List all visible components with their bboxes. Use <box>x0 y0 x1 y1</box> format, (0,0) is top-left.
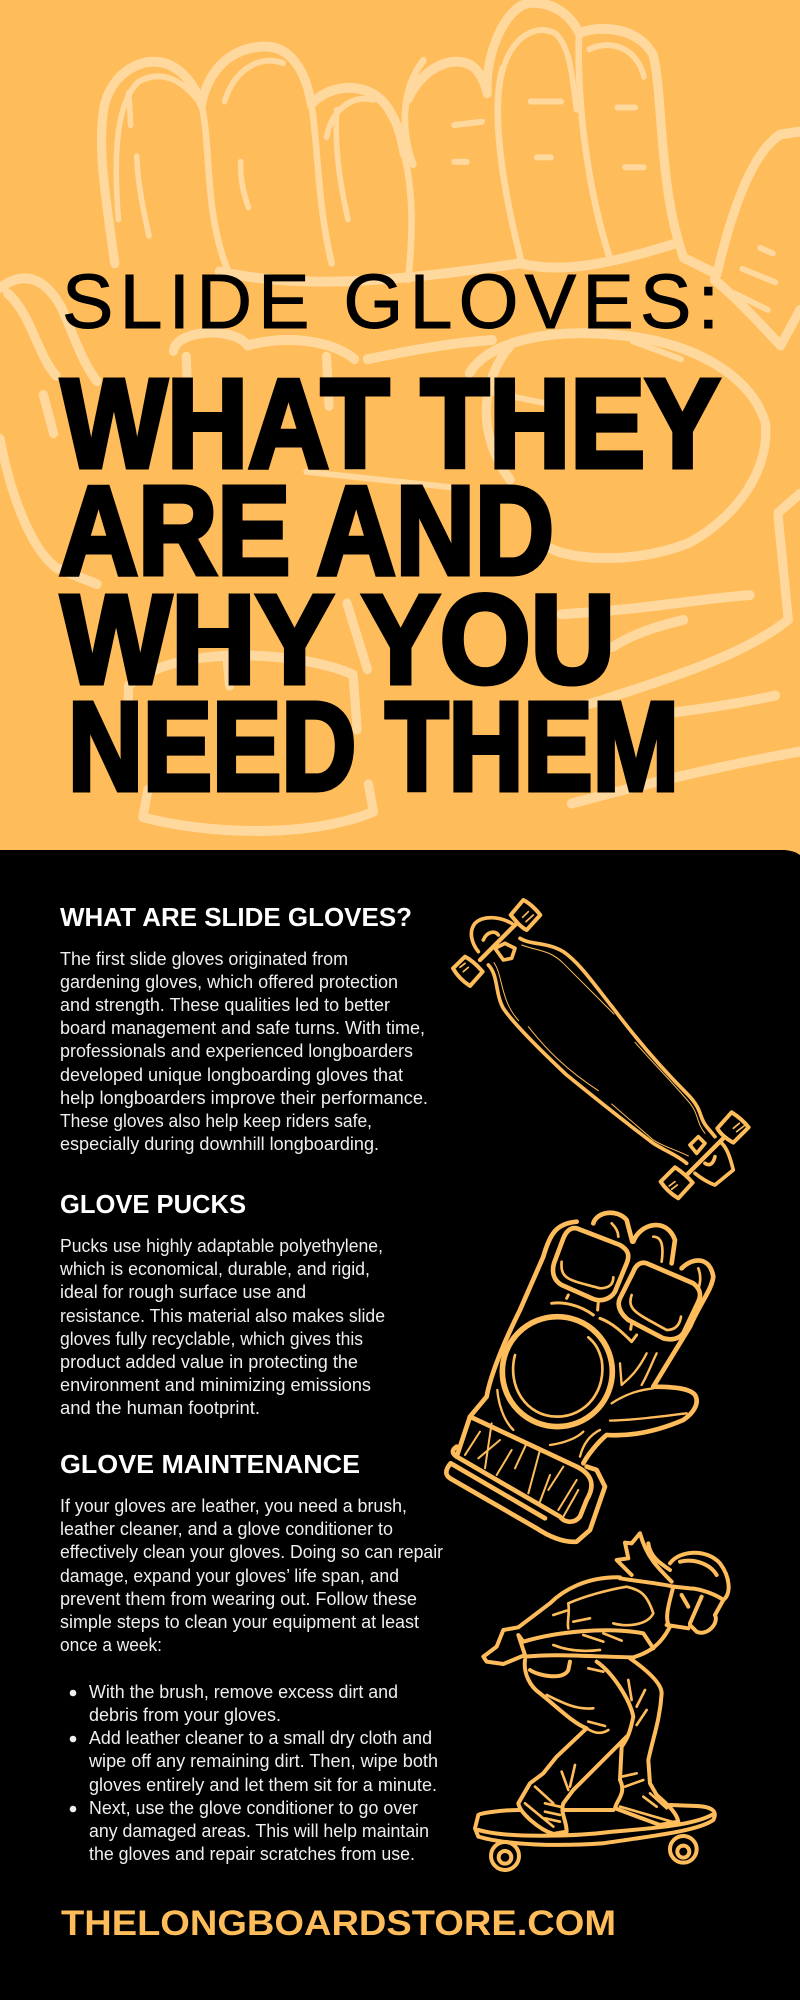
text block: what are slide gloves: board management and safe turns. With time, <box>60 1018 425 1038</box>
bullet list: cleaning steps: Next, use the glove conditioner to go over <box>89 1798 418 1818</box>
text block: what are slide gloves: developed unique longboarding gloves that <box>60 1065 403 1085</box>
icon: skater on longboard <box>475 1533 729 1870</box>
text block: glove maintenance <box>60 1496 443 1655</box>
bullet list: cleaning steps: With the brush, remove excess dirt and <box>89 1682 398 1702</box>
icon: longboard <box>453 900 749 1198</box>
panel: orange header background <box>0 0 800 870</box>
text block: glove maintenance: effectively clean your gloves. Doing so can repair <box>60 1542 443 1562</box>
bullet list: cleaning steps: the gloves and repair scratches from use. <box>89 1844 415 1864</box>
title: what they are and why you need them: WHAT THEY <box>61 353 720 494</box>
text block: what are slide gloves: and strength. These qualities led to better <box>60 995 390 1015</box>
bullet list: cleaning steps: debris from your gloves. <box>89 1705 281 1725</box>
title: SLIDE GLOVES: SLIDE GLOVES: <box>62 259 719 345</box>
text block: glove maintenance: If your gloves are leather, you need a brush, <box>60 1496 407 1516</box>
text block: glove maintenance: simple steps to clean your equipment at least <box>60 1612 419 1632</box>
text block: glove pucks <box>59 1236 385 1418</box>
title: what they are and why you need them: WHY YOU <box>61 569 615 710</box>
bullet list: cleaning steps: Add leather cleaner to a small dry cloth and <box>89 1728 432 1748</box>
text block: what are slide gloves: professionals and experienced longboarders <box>60 1041 413 1061</box>
panel: black content background <box>0 850 800 2000</box>
bullet list: cleaning steps: wipe off any remaining dirt. Then, wipe both <box>88 1751 438 1771</box>
text block: glove pucks: gloves fully recyclable, which gives this <box>60 1329 363 1349</box>
text block: what are slide gloves <box>60 949 428 1154</box>
icon: slide glove <box>446 1213 713 1542</box>
text block: what are slide gloves: gardening gloves, which offered protection <box>60 972 398 992</box>
background illustration: pale gloves outline <box>0 3 800 831</box>
heading: what are slide gloves: WHAT ARE SLIDE GLOVES? <box>60 902 412 932</box>
bullet list: cleaning steps: any damaged areas. This will help maintain <box>89 1821 429 1841</box>
title: what they are and why you need them <box>59 353 720 817</box>
heading: glove maintenance: GLOVE MAINTENANCE <box>60 1449 360 1479</box>
bullet list: cleaning steps <box>70 1682 438 1864</box>
bullet list: cleaning steps: gloves entirely and let them sit for a minute. <box>89 1775 437 1795</box>
title: what they are and why you need them: NEED THEM <box>68 676 679 817</box>
footer: website: THELONGBOARDSTORE.COM <box>61 1904 616 1943</box>
text block: what are slide gloves: The first slide gloves originated from <box>60 949 348 969</box>
text block: glove pucks: environment and minimizing emissions <box>60 1375 371 1395</box>
text block: glove pucks: product added value in protecting the <box>60 1352 358 1372</box>
text block: glove maintenance: prevent them from wearing out. Follow these <box>60 1589 417 1609</box>
text block: glove pucks: resistance. This material also makes slide <box>60 1306 385 1326</box>
text block: what are slide gloves: help longboarders improve their performance. <box>60 1088 428 1108</box>
text block: glove pucks: which is economical, durable, and rigid, <box>59 1259 370 1279</box>
text block: glove pucks: and the human footprint. <box>60 1398 260 1418</box>
text block: what are slide gloves: These gloves also help keep riders safe, <box>60 1111 372 1131</box>
text block: glove maintenance: once a week: <box>60 1635 162 1655</box>
text block: glove maintenance: leather cleaner, and a glove conditioner to <box>60 1519 393 1539</box>
title: what they are and why you need them: ARE AND <box>59 460 554 601</box>
text block: glove pucks: ideal for rough surface use and <box>60 1282 306 1302</box>
text block: glove pucks: Pucks use highly adaptable polyethylene, <box>60 1236 383 1256</box>
text block: glove maintenance: damage, expand your gloves’ life span, and <box>60 1566 399 1586</box>
heading: glove pucks: GLOVE PUCKS <box>60 1189 246 1219</box>
text block: what are slide gloves: especially during downhill longboarding. <box>60 1134 379 1154</box>
